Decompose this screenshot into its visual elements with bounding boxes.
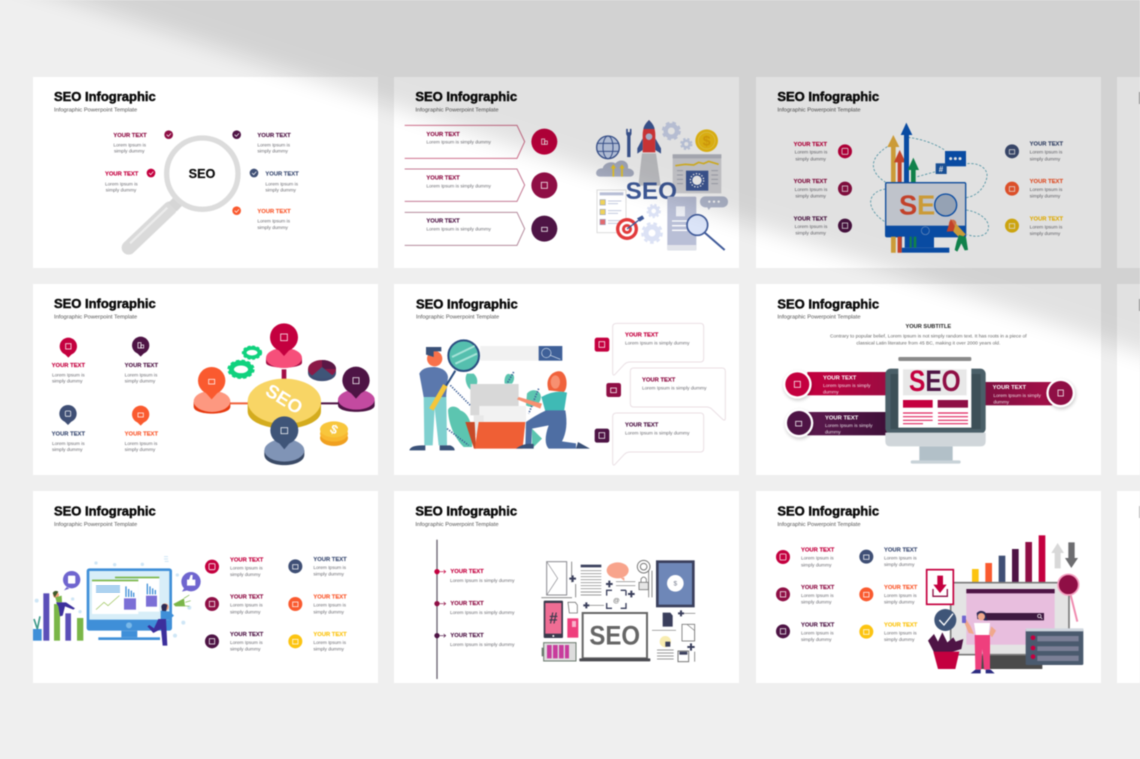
item: top left: simply dummy [114, 149, 145, 155]
item: column 1 row 1: Lorem Ipsum is [801, 556, 834, 562]
item: right 1 [1005, 142, 1063, 162]
banner: maroon right: YOUR TEXT [993, 385, 1026, 391]
item: column 2 row 2: simply dummy [884, 600, 915, 606]
item 1: Lorem Ipsum is simply dummy [426, 140, 492, 146]
item: pin slate: YOUR TEXT [52, 432, 85, 438]
title: SEO Infographic [415, 504, 517, 519]
item: pin purple [125, 337, 158, 385]
item: column 2 row 1: YOUR TEXT [313, 557, 347, 563]
banner: maroon right: dummy [993, 400, 1010, 406]
illustration: search monitor with woman [927, 535, 1083, 673]
item: top right: Lorem Ipsum is [257, 142, 291, 148]
illustration: monitor with growth arrows: E [917, 189, 935, 220]
item: column 2 row 3 [859, 622, 918, 643]
panel: cropped next column, row 1 [1117, 77, 1140, 268]
item: column 1 row 2 [776, 585, 835, 606]
callout 2 [606, 368, 725, 420]
banner: crimson: YOUR TEXT [823, 376, 857, 382]
item: left 3: simply dummy [795, 231, 826, 237]
item: left 3: Lorem Ipsum is [795, 224, 828, 230]
item: column 2 row 3: YOUR TEXT [884, 622, 918, 628]
item: column 2 row 3: Lorem Ipsum is [884, 630, 917, 636]
item: pin crimson: YOUR TEXT [52, 363, 85, 369]
item 1 [405, 125, 557, 158]
icon: magnifying glass: SEO [189, 167, 216, 181]
item: middle left: simply dummy [106, 188, 137, 194]
item: bottom right [232, 206, 291, 231]
item: column 1 row 2: Lorem Ipsum is [801, 593, 834, 599]
item: column 2 row 2: Lorem Ipsum is [313, 603, 347, 609]
item 3: Lorem Ipsum is simply dummy [426, 227, 492, 233]
item: column 2 row 1: YOUR TEXT [884, 547, 918, 553]
item: left 1 [794, 142, 852, 162]
item: column 2 row 2: YOUR TEXT [313, 595, 347, 601]
callout 3: YOUR TEXT [625, 422, 659, 428]
timeline item 2 [434, 601, 515, 616]
callout 2: YOUR TEXT [642, 377, 676, 383]
item 3 [405, 212, 557, 245]
illustration: monitor with growth arrows [871, 123, 989, 253]
item: right 2 [1005, 179, 1063, 200]
panel: magnifier SEO slide [33, 77, 378, 268]
item: top left [113, 130, 173, 155]
item: column 2 row 1: simply dummy [884, 562, 915, 568]
item: column 1 row 3: simply dummy [801, 637, 832, 643]
illustration: SEO icon cluster: SEO [626, 179, 677, 205]
item: column 1 row 1: YOUR TEXT [230, 557, 264, 563]
illustration: monitor with SEO page: SEO [909, 365, 961, 398]
item: pin slate: Lorem Ipsum is [52, 441, 85, 447]
item: column 1 row 3 [205, 632, 264, 653]
illustration: monitor with growth arrows: S [899, 189, 917, 220]
banner: crimson: Lorem Ipsum is simply [823, 383, 871, 389]
banner: purple: dummy [825, 429, 841, 435]
item: column 1 row 3: YOUR TEXT [230, 632, 264, 638]
panel: cropped next column, row 3 [1117, 491, 1140, 683]
item: left 2: YOUR TEXT [794, 179, 827, 185]
section subtitle: YOUR SUBTITLE [905, 324, 951, 330]
description text [830, 334, 1027, 345]
title: SEO Infographic [54, 296, 156, 311]
item: pin orange: Lorem Ipsum is [125, 441, 158, 447]
illustration: SEO icon grid: # [549, 610, 558, 627]
callout 2: Lorem Ipsum is simply dummy [642, 385, 707, 391]
item: middle right: YOUR TEXT [265, 172, 299, 178]
banner: purple [785, 409, 887, 439]
item: bottom right: Lorem Ipsum is [257, 219, 291, 225]
item: pin orange [125, 406, 158, 453]
item: column 2 row 1: Lorem Ipsum is [884, 555, 917, 561]
item: column 1 row 3: Lorem Ipsum is [801, 630, 834, 636]
title: SEO Infographic [416, 296, 518, 311]
item: pin crimson: Lorem Ipsum is [52, 372, 85, 378]
subtitle: Infographic Powerpoint Template [54, 107, 137, 113]
item: column 2 row 2: YOUR TEXT [884, 585, 918, 591]
item: middle right: simply dummy [265, 188, 296, 194]
timeline item 3 [434, 633, 515, 648]
banner: maroon right [984, 379, 1076, 409]
item: pin crimson [52, 338, 85, 385]
item: column 2 row 3: YOUR TEXT [313, 632, 347, 638]
illustration: monitor with growth arrows: # [939, 165, 944, 174]
item: column 1 row 3 [776, 622, 835, 643]
callout 1: YOUR TEXT [625, 332, 659, 338]
item: right 1: Lorem Ipsum is [1030, 150, 1063, 156]
item: right 2: Lorem Ipsum is [1030, 187, 1063, 193]
panel: SEO monitor banners slide [756, 284, 1101, 475]
banner: crimson [783, 370, 887, 401]
item: left 2: Lorem Ipsum is [795, 187, 828, 193]
item: left 3: YOUR TEXT [794, 216, 827, 222]
item: right 3: Lorem Ipsum is [1030, 224, 1063, 230]
subtitle: Infographic Powerpoint Template [415, 522, 499, 528]
item: left 3 [794, 216, 852, 237]
illustration: isometric SEO hub: SEO [262, 380, 307, 418]
illustration: SEO icon grid [541, 560, 695, 662]
description text: classical Latin literature from 45 BC, making it over 2000 years old. [856, 340, 1000, 345]
item: right 2: simply dummy [1030, 194, 1061, 200]
timeline item 3: Lorem Ipsum is simply dummy [450, 642, 515, 648]
item: middle left: Lorem Ipsum is [105, 181, 138, 187]
item: column 1 row 1: Lorem Ipsum is [230, 565, 263, 571]
title: SEO Infographic [777, 89, 879, 104]
item: column 1 row 2: YOUR TEXT [801, 585, 835, 591]
item: column 1 row 3: YOUR TEXT [801, 622, 835, 628]
item: column 2 row 3: simply dummy [884, 637, 915, 643]
item: pin slate: simply dummy [52, 447, 83, 453]
item: left 2 [794, 179, 852, 200]
item: bottom right: YOUR TEXT [257, 209, 291, 215]
item: column 1 row 2: simply dummy [230, 609, 261, 615]
subtitle: Infographic Powerpoint Template [777, 315, 861, 321]
callout 1: Lorem Ipsum is simply dummy [625, 340, 690, 346]
item: column 1 row 3: Lorem Ipsum is [230, 640, 263, 646]
title: SEO Infographic [777, 296, 879, 311]
item: column 1 row 2: simply dummy [801, 600, 832, 606]
illustration: SEO icon grid: $ [673, 581, 677, 588]
title: SEO Infographic [777, 504, 879, 519]
item: pin orange: YOUR TEXT [125, 432, 158, 438]
item: column 1 row 1: YOUR TEXT [801, 548, 835, 554]
illustration: SEO icon grid: SEO [589, 620, 640, 650]
description text: Contrary to popular belief, Lorem Ipsum is not simply random text. It has roots in a piece of [830, 334, 1027, 339]
item: column 2 row 3 [288, 632, 347, 653]
timeline item 2: YOUR TEXT [450, 601, 484, 607]
panel: isometric hub slide [33, 284, 378, 475]
item: top right: simply dummy [257, 149, 288, 155]
subtitle: Infographic Powerpoint Template [416, 315, 499, 321]
item: column 2 row 2 [288, 595, 347, 615]
item 2: YOUR TEXT [426, 176, 460, 182]
banner: maroon right: Lorem Ipsum is simply [993, 393, 1041, 399]
illustration: isometric SEO hub: $ [328, 422, 340, 437]
timeline axis [436, 540, 438, 679]
banner: purple: Lorem Ipsum is simply [825, 423, 873, 429]
item: column 2 row 3: Lorem Ipsum is [313, 640, 347, 646]
item: column 1 row 2: YOUR TEXT [230, 595, 264, 601]
item: top left: Lorem Ipsum is [113, 142, 147, 148]
item: middle left [105, 169, 155, 194]
item: right 3: YOUR TEXT [1030, 217, 1063, 223]
item 2 [405, 169, 557, 201]
panel: speech bubbles slide [394, 284, 739, 475]
icon: magnifying glass [129, 138, 238, 248]
callout 3 [595, 413, 704, 465]
panel: search monitor slide [756, 491, 1101, 683]
item: column 2 row 2 [859, 585, 918, 606]
item: left 1: simply dummy [795, 156, 826, 162]
item: column 1 row 1 [776, 548, 835, 568]
item: right 2: YOUR TEXT [1030, 179, 1063, 185]
window light shadow overlay [0, 0, 1140, 386]
item 2: Lorem Ipsum is simply dummy [426, 183, 492, 189]
subtitle: Infographic Powerpoint Template [777, 522, 861, 528]
item: column 2 row 1 [288, 557, 347, 578]
item: column 2 row 1: simply dummy [313, 572, 344, 578]
title: SEO Infographic [54, 89, 156, 104]
title: SEO Infographic [415, 89, 517, 104]
illustration: monitor with bars and people [33, 557, 201, 646]
item: pin purple: Lorem Ipsum is [125, 372, 158, 378]
item: right 1: YOUR TEXT [1030, 142, 1063, 148]
item: pin slate [52, 405, 85, 453]
item: top right: YOUR TEXT [257, 133, 291, 139]
callout 1 [595, 323, 704, 375]
illustration: isometric SEO hub [194, 323, 375, 465]
title: SEO Infographic [54, 504, 156, 519]
item: pin crimson: simply dummy [52, 379, 83, 385]
illustration: SEO icon cluster [596, 120, 728, 250]
item: middle right: Lorem Ipsum is [265, 181, 299, 187]
item: column 1 row 3: simply dummy [230, 647, 261, 653]
item: column 2 row 1 [859, 547, 918, 568]
item 1: YOUR TEXT [426, 132, 460, 138]
timeline item 1: Lorem Ipsum is simply dummy [450, 578, 515, 584]
item: left 1: Lorem Ipsum is [795, 150, 828, 156]
item 3: YOUR TEXT [426, 219, 460, 225]
item: middle left: YOUR TEXT [105, 172, 139, 178]
callout 3: Lorem Ipsum is simply dummy [625, 430, 690, 436]
panel: cropped next column, row 2 [1117, 284, 1140, 475]
item: column 2 row 2: Lorem Ipsum is [884, 593, 917, 599]
timeline item 1: YOUR TEXT [450, 569, 484, 575]
item: column 1 row 2: Lorem Ipsum is [230, 603, 263, 609]
item: column 2 row 1: Lorem Ipsum is [313, 565, 347, 571]
item: right 3 [1005, 217, 1063, 237]
subtitle: Infographic Powerpoint Template [777, 107, 861, 113]
illustration: monitor with SEO page [885, 357, 986, 464]
item: middle right [250, 169, 299, 194]
illustration: SEO icon cluster: $ [703, 133, 711, 149]
panel: monitor analytics slide [33, 491, 378, 683]
illustration: SEO icon grid: @ [613, 597, 620, 604]
panel: arrow list and SEO icons slide [394, 77, 739, 268]
item: pin purple: YOUR TEXT [125, 363, 158, 369]
subtitle: Infographic Powerpoint Template [415, 107, 499, 113]
panel: timeline with icon grid slide [394, 491, 739, 683]
item: pin purple: simply dummy [125, 379, 156, 385]
timeline item 2: Lorem Ipsum is simply dummy [450, 610, 515, 616]
item: column 1 row 1 [205, 557, 264, 578]
timeline item 1 [434, 569, 515, 584]
item: bottom right: simply dummy [257, 225, 288, 231]
illustration: people searching [409, 340, 590, 450]
item: top right [232, 130, 291, 155]
item: column 1 row 1: simply dummy [801, 562, 832, 568]
item: column 2 row 2: simply dummy [313, 609, 344, 615]
banner: crimson: dummy [823, 389, 839, 395]
panel: growth arrows monitor slide [756, 77, 1101, 268]
item: pin orange: simply dummy [125, 447, 156, 453]
item: right 3: simply dummy [1030, 231, 1061, 237]
item: column 1 row 2 [205, 595, 264, 615]
subtitle: Infographic Powerpoint Template [54, 314, 137, 320]
item: column 2 row 3: simply dummy [313, 647, 344, 653]
item: left 2: simply dummy [795, 194, 826, 200]
subtitle: Infographic Powerpoint Template [54, 522, 137, 528]
banner: purple: YOUR TEXT [825, 416, 859, 422]
item: left 1: YOUR TEXT [794, 142, 827, 148]
timeline item 3: YOUR TEXT [450, 633, 484, 639]
item: top left: YOUR TEXT [113, 133, 147, 139]
item: column 1 row 1: simply dummy [230, 572, 261, 578]
item: right 1: simply dummy [1030, 156, 1061, 162]
